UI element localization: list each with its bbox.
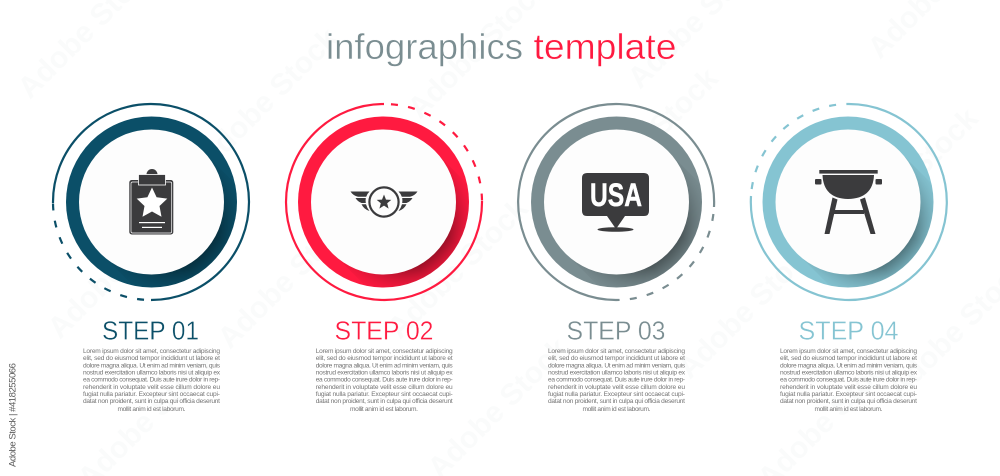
step label: STEP 01 (102, 316, 199, 346)
text block: nostrud exercitation ullamco laboris nisi ut aliquip ex (780, 370, 918, 377)
text block (780, 348, 918, 413)
text block: Lorem ipsum dolor sit amet, consectetur adipiscing (780, 348, 917, 355)
panel: step 02 (284, 102, 484, 411)
text block (548, 348, 686, 413)
text block: fugiat nulla pariatur. Excepteur sint occaecat cupi- (316, 391, 453, 398)
text block: rehenderit in voluptate velit esse cillum dolore eu (83, 384, 220, 391)
icon: clipboard with star (129, 169, 173, 234)
title (326, 26, 676, 67)
panel: step 01 (52, 102, 250, 411)
text block (83, 348, 221, 413)
thin ring with dashes (286, 104, 482, 300)
text block: datat non proident, sunt in culpa qui officia deserunt (316, 398, 453, 405)
text block: rehenderit in voluptate velit esse cillum dolore eu (780, 384, 917, 391)
text block: mollit anim id est laborum. (582, 406, 651, 413)
watermark: Adobe Stock (212, 202, 365, 355)
step label: STEP 03 (566, 316, 666, 346)
text block: dolore magna aliqua. Ut enim ad minim veniam, quis (83, 362, 221, 370)
text block: fugiat nulla pariatur. Excepteur sint occaecat cupi- (780, 391, 917, 398)
watermark: Adobe Stock (572, 62, 725, 215)
watermark: Adobe Stock (382, 192, 535, 345)
text block: datat non proident, sunt in culpa qui officia deserunt (83, 398, 220, 405)
stock credit: Adobe Stock | #418255066 (8, 363, 18, 467)
text block: nostrud exercitation ullamco laboris nisi ut aliquip ex (83, 370, 221, 377)
text block: nostrud exercitation ullamco laboris nisi ut aliquip ex (316, 370, 453, 377)
panel: step 03 (517, 102, 716, 411)
panel: step 04 (750, 102, 948, 411)
text block: mollit anim id est laborum. (814, 406, 883, 413)
text block: ea commodo consequat. Duis aute irure dolor in rep- (83, 377, 220, 384)
text block: rehenderit in voluptate velit esse cillum dolore eu (548, 384, 685, 391)
text block: elit, sed do eiusmod tempor incididunt ut labore et (548, 355, 685, 362)
text block (316, 348, 453, 413)
text block: ea commodo consequat. Duis aute irure dolor in rep- (780, 377, 917, 384)
text block: Lorem ipsum dolor sit amet, consectetur adipiscing (548, 348, 685, 355)
thin ring with dashes (53, 104, 249, 300)
thin ring with dashes (751, 104, 947, 300)
donut with inner disc (531, 116, 702, 288)
text block: dolore magna aliqua. Ut enim ad minim veniam, quis (780, 362, 918, 370)
text block: fugiat nulla pariatur. Excepteur sint occaecat cupi- (83, 391, 220, 398)
icon: barbecue grill (815, 170, 882, 234)
text block: datat non proident, sunt in culpa qui officia deserunt (548, 398, 685, 405)
text block: mollit anim id est laborum. (118, 406, 186, 413)
donut with inner disc (298, 116, 469, 288)
text block: datat non proident, sunt in culpa qui officia deserunt (780, 398, 917, 405)
donut with inner disc (762, 116, 934, 288)
donut with inner disc (66, 116, 237, 288)
icon: USA speech pin (582, 173, 649, 232)
text block: elit, sed do eiusmod tempor incididunt ut labore et (780, 355, 917, 362)
text block: ea commodo consequat. Duis aute irure dolor in rep- (316, 377, 453, 384)
icon: USA speech pin: USA (590, 177, 642, 213)
watermark: Adobe Stock (832, 102, 985, 255)
text block: elit, sed do eiusmod tempor incididunt ut labore et (83, 355, 220, 362)
icon: winged star badge (350, 187, 418, 217)
watermark: Adobe Stock (42, 192, 195, 345)
watermark: Adobe Stock (672, 232, 825, 385)
text block: nostrud exercitation ullamco laboris nisi ut aliquip ex (548, 370, 686, 377)
text block: fugiat nulla pariatur. Excepteur sint occaecat cupi- (548, 391, 685, 398)
text block: rehenderit in voluptate velit esse cillum dolore eu (316, 384, 453, 391)
text block: dolore magna aliqua. Ut enim ad minim veniam, quis (316, 362, 453, 370)
step label: STEP 02 (334, 316, 434, 346)
title: template (534, 26, 676, 67)
step label: STEP 04 (798, 316, 898, 346)
watermark: Adobe Stock (192, 22, 345, 175)
thin ring with dashes (518, 104, 714, 300)
text block: dolore magna aliqua. Ut enim ad minim veniam, quis (548, 362, 686, 370)
text block: elit, sed do eiusmod tempor incididunt ut labore et (316, 355, 453, 362)
text block: ea commodo consequat. Duis aute irure dolor in rep- (548, 377, 685, 384)
text block: Lorem ipsum dolor sit amet, consectetur adipiscing (316, 348, 453, 355)
title: infographics (326, 26, 523, 67)
text block: Lorem ipsum dolor sit amet, consectetur adipiscing (83, 348, 220, 355)
text block: mollit anim id est laborum. (350, 406, 418, 413)
